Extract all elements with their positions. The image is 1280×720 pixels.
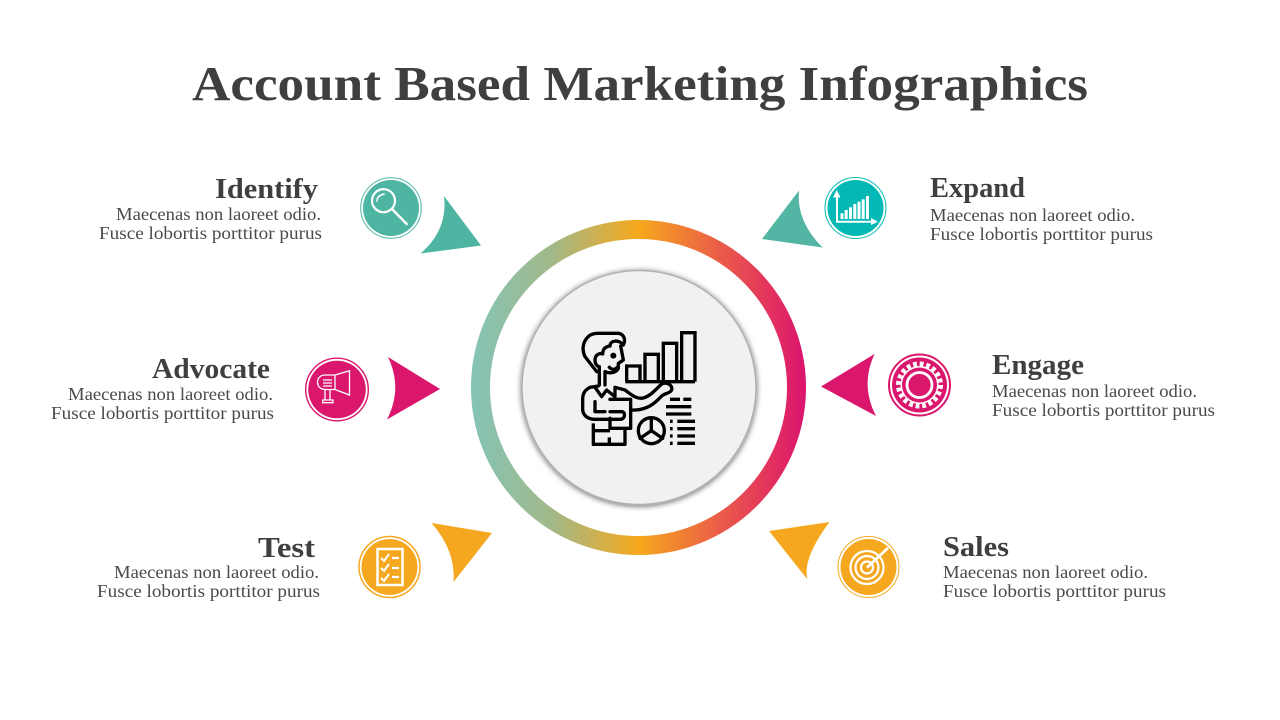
text block: advocate (51, 354, 274, 423)
text block: expand: Expand (930, 173, 1025, 204)
text block: advocate: Maecenas non laoreet odio. (68, 384, 273, 404)
icon: identify magnifier (361, 178, 421, 238)
text block: expand (930, 173, 1153, 244)
text block: identify: Maecenas non laoreet odio. (116, 204, 321, 224)
icon: expand growth chart (825, 178, 886, 238)
text block: sales: Maecenas non laoreet odio. (943, 562, 1148, 582)
arrow: identify (420, 196, 481, 254)
central disc (522, 270, 756, 504)
arrow: advocate (387, 357, 440, 420)
text block: identify (99, 174, 322, 243)
icon: test checklist (359, 536, 420, 598)
text block: expand: Maecenas non laoreet odio. (930, 205, 1135, 225)
text block: engage: Fusce lobortis porttitor purus (992, 400, 1215, 420)
text block: sales (943, 532, 1166, 601)
arrow: sales (769, 522, 830, 580)
text block: test: Test (258, 533, 316, 564)
arrow: expand (762, 190, 822, 248)
text block: advocate: Advocate (152, 354, 270, 385)
text block: sales: Fusce lobortis porttitor purus (943, 581, 1166, 601)
text block: identify: Fusce lobortis porttitor purus (99, 223, 322, 243)
icon: sales target (838, 536, 899, 598)
text block: identify: Identify (215, 174, 318, 205)
arrow: test (432, 523, 492, 582)
icon: engage gear (889, 354, 950, 416)
text block: engage (992, 350, 1215, 420)
icon: presenter with chart (583, 333, 695, 444)
text block: advocate: Fusce lobortis porttitor purus (51, 403, 274, 423)
text block: test: Maecenas non laoreet odio. (114, 562, 319, 582)
text block: engage: Maecenas non laoreet odio. (992, 381, 1197, 401)
text block: sales: Sales (943, 532, 1009, 563)
title: Account Based Marketing Infographics (192, 56, 1088, 111)
text block: expand: Fusce lobortis porttitor purus (930, 224, 1153, 244)
text block: engage: Engage (992, 350, 1084, 381)
text block: test (97, 533, 320, 601)
text block: test: Fusce lobortis porttitor purus (97, 581, 320, 601)
icon: advocate megaphone (306, 358, 368, 421)
arrow: engage (821, 354, 876, 416)
central gradient ring (480, 230, 796, 546)
